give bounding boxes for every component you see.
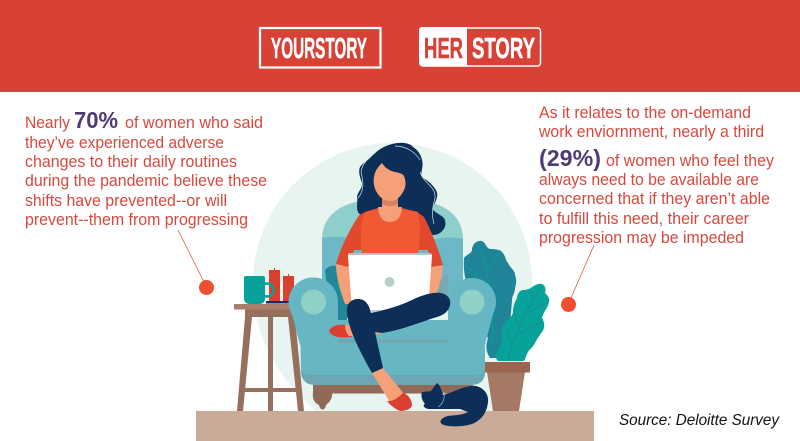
logo: HerStory — [419, 27, 540, 66]
floor — [196, 411, 594, 441]
background circle — [253, 143, 532, 411]
left text block: shifts have prevented--or will — [25, 192, 227, 210]
callout pointer: right — [561, 245, 594, 312]
left text block: changes to their daily routines — [25, 153, 237, 171]
right text block — [538, 104, 775, 247]
right text block: work enviornment, nearly a third — [538, 123, 764, 141]
statistic: 29%: (29%) — [539, 145, 601, 171]
left text block — [25, 107, 267, 229]
face — [374, 163, 406, 201]
logo: HerStory: HER — [424, 33, 463, 65]
right text block: of women who feel they — [606, 152, 775, 170]
right text block: always need to be available are — [539, 171, 759, 189]
logo: YourStory: YOURSTORY — [271, 33, 367, 65]
stool with mug and candles — [234, 268, 304, 411]
header banner — [0, 0, 800, 92]
right text block: progression may be impeded — [539, 229, 744, 247]
left text block: Nearly — [25, 114, 71, 132]
cushion — [325, 266, 352, 325]
neck and neckline — [378, 207, 402, 222]
cat — [421, 383, 488, 426]
left text block: they’ve experienced adverse — [25, 134, 224, 152]
source note: Source: Deloitte Survey — [619, 412, 780, 429]
hair — [357, 143, 445, 235]
stool — [234, 304, 304, 411]
left text block: during the pandemic believe these — [25, 172, 267, 190]
logo: YourStory — [260, 28, 380, 68]
chair back — [322, 198, 463, 300]
logo: HerStory: STORY — [472, 33, 535, 65]
chair legs — [313, 385, 473, 410]
torso — [336, 208, 443, 267]
arms — [336, 264, 354, 304]
plant pot — [483, 362, 530, 411]
chair arm: right — [448, 278, 496, 345]
candles — [266, 268, 294, 304]
chair arm: left — [288, 278, 338, 345]
icon: plant — [464, 241, 549, 411]
left text block: of women who said — [125, 114, 263, 132]
icon: mug — [244, 276, 274, 304]
callout pointer: left — [178, 230, 214, 295]
legs — [329, 293, 450, 411]
right text block: concerned that if they aren’t able — [539, 190, 770, 208]
chair body — [300, 320, 485, 385]
right text block: to fulfill this need, their career — [539, 210, 750, 228]
right text block: As it relates to the on-demand — [539, 104, 751, 122]
left text block: prevent--them from progressing — [25, 211, 248, 229]
woman — [329, 143, 450, 411]
icon: laptop — [348, 253, 432, 313]
statistic: 70%: 70% — [74, 107, 118, 133]
armchair — [288, 198, 496, 410]
